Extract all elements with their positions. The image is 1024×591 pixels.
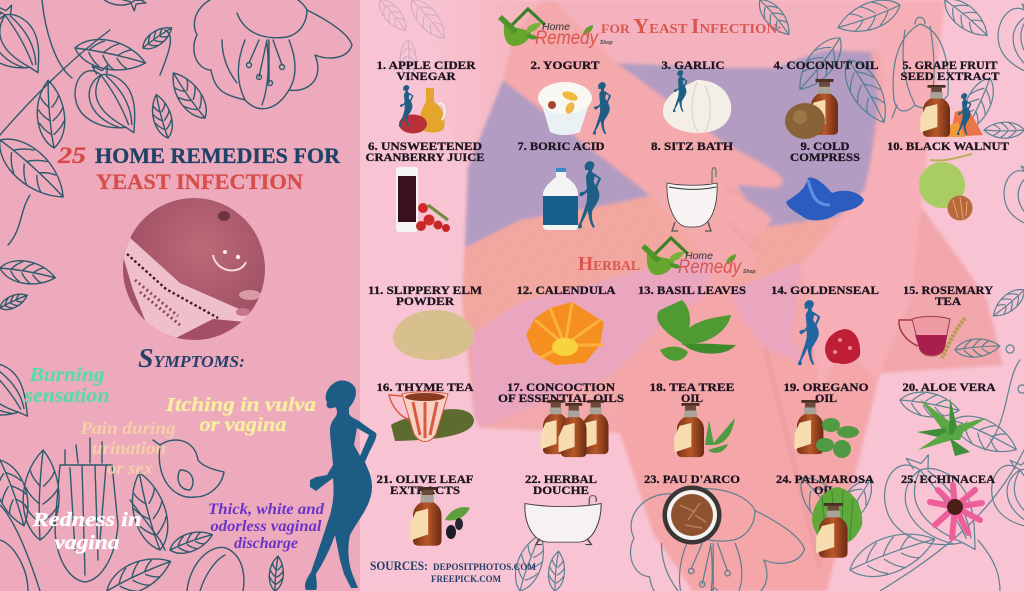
label [900,58,1000,83]
sources: SOURCES: [370,559,428,573]
remedy 19 [784,380,868,458]
label: 8. SITZ BATH [651,139,734,153]
icon: vinegar and apple [399,85,445,134]
label [903,283,993,308]
panel: right background [360,0,1024,591]
label: 9. COLD [800,139,850,153]
remedy 16 [376,380,474,442]
label [790,139,860,164]
icon: bottle and oregano [794,400,859,458]
icon: rosemary tea cup [899,316,965,358]
label: 11. SLIPPERY ELM [368,283,482,297]
logo: home remedy shop herbal [643,238,756,278]
heading: herbal: HERBAL [578,253,640,275]
line art: left floral decoration [0,0,352,591]
icon: grass and bottle [812,487,862,558]
label: SEED EXTRACT [900,69,1000,83]
remedy 13 [638,283,746,361]
panel: left background [0,0,360,591]
label: 5. GRAPE FRUIT [902,58,998,72]
symptom: burning sensation [23,364,110,407]
remedy 9 [786,139,864,220]
remedy 2 [530,58,611,135]
remedy 5 [900,58,1000,137]
icon: cranberry juice glass [396,167,450,232]
label: 14. GOLDENSEAL [771,283,879,297]
remedy 25 [901,472,995,538]
label: 24. PALMAROSA [776,472,874,486]
symptoms heading: SYMPTOMS: [138,343,245,373]
label: 23. PAU D'ARCO [644,472,740,486]
label [376,472,474,497]
remedy 7 [518,139,605,230]
remedy 23 [644,472,740,544]
sources [370,559,536,585]
symptom: pain during urination or sex [79,418,176,478]
label [776,472,874,497]
remedy 24 [776,472,874,558]
label: OF ESSENTIAL OILS [498,391,624,405]
label: 17. CONCOCTION [507,380,615,394]
circular photo: belly with smiley underwear [123,198,265,340]
label: CRANBERRY JUICE [366,150,484,164]
label [366,139,484,164]
symptom: discharge: odorless vaginal [210,518,322,535]
icon: pau d'arco bowl [662,486,722,544]
remedy 4 [774,58,878,139]
remedy 11 [368,283,482,360]
label: 25. ECHINACEA [901,472,995,486]
symptom: discharge [208,501,325,552]
symptom: itching: or vagina [200,414,286,436]
icon: powder pile [393,310,474,360]
remedy 3 [662,58,731,133]
remedy 20 [902,380,996,456]
remedy 18 [650,380,735,457]
label: EXTRACTS [390,483,460,497]
icon: calendula flower [526,302,604,365]
label: 10. BLACK WALNUT [887,139,1009,153]
remedy 10 [887,139,1009,220]
label: 16. THYME TEA [376,380,474,394]
label: 15. ROSEMARY [903,283,993,297]
icon: blue cloth [786,177,864,220]
sources: DEPOSITPHOTOS.COM [433,563,536,573]
label: 1. APPLE CIDER [376,58,476,72]
title [57,143,341,194]
remedy 12 [516,283,616,365]
label: 13. BASIL LEAVES [638,283,746,297]
heading: for yeast infection: FOR YEAST INFECTION: [601,14,782,38]
remedy 6 [366,139,484,232]
label [376,58,476,83]
icon: goldenseal berries and silhouette [798,300,860,365]
remedy 22 [525,472,601,545]
symptom: itching [165,394,316,436]
label [650,380,734,405]
label: TEA [935,294,961,308]
symptom: redness: vagina [54,532,120,554]
label: POWDER [396,294,454,308]
label [368,283,482,308]
photo background: torso, skirt, arms and legs [430,0,1003,591]
icon: yogurt cup [538,82,611,135]
remedy 14 [771,283,879,365]
icon: three oil bottles [540,400,608,457]
label: OIL [814,483,836,497]
label: 3. GARLIC [662,58,724,72]
icon: echinacea flower [930,485,982,538]
sources: FREEPICK.COM [431,575,501,585]
label: OIL [681,391,703,405]
label: 2. YOGURT [530,58,600,72]
symptom: redness [31,509,141,554]
logo: home remedy shop top [500,9,612,49]
title line 2: YEAST INFECTION [96,169,303,194]
icon: walnut [919,154,972,220]
symptom: pain during urination or sex: or sex [107,458,153,478]
icon: boric acid bottle [543,161,601,230]
label: 22. HERBAL [525,472,597,486]
title line 1: 25 [57,143,86,168]
icon: thyme tea cup [389,392,474,442]
label: 7. BORIC ACID [518,139,605,153]
icon: bottle and tea tree leaves [674,403,735,457]
symptom: burning sensation: sensation [23,385,110,407]
label [498,380,624,405]
remedy 1 [376,58,476,134]
label: VINEGAR [396,69,456,83]
icon: bath tub [667,168,717,231]
symptom: redness: Redness in [31,509,141,531]
symptom: burning sensation: Burning [28,364,104,386]
icon: basil leaves [657,300,736,361]
label: 12. CALENDULA [516,283,616,297]
title: HOME REMEDIES FOR [95,143,341,168]
icon: garlic [663,70,731,133]
icon: douche tub [525,496,601,545]
remedy 21 [376,472,474,546]
label: DOUCHE [533,483,589,497]
silhouette: woman [305,381,376,590]
symptom: pain during urination or sex: urination [92,438,166,458]
remedy 15 [899,283,993,358]
symptom: itching: Itching in vulva [165,394,316,416]
label: 21. OLIVE LEAF [376,472,474,486]
symptom: discharge: discharge [234,535,298,552]
icon: bottle and olives [410,487,470,546]
label: 19. OREGANO [784,380,868,394]
icon: aloe vera [917,398,987,456]
remedy 17 [498,380,624,457]
line art: right floral decoration [374,0,1024,591]
label [784,380,868,405]
label: COMPRESS [790,150,860,164]
symptom: pain during urination or sex: Pain during [79,418,176,438]
label: 6. UNSWEETENED [368,139,482,153]
icon: coconut and bottle [785,79,838,139]
label: 18. TEA TREE [650,380,734,394]
label: 4. COCONUT OIL [774,58,878,72]
icon: bottle and grapefruit [920,85,983,137]
remedy 8 [651,139,734,231]
label [525,472,597,497]
label: 20. ALOE VERA [902,380,996,394]
symptom: discharge: Thick, white and [208,501,325,518]
label: OIL [815,391,837,405]
